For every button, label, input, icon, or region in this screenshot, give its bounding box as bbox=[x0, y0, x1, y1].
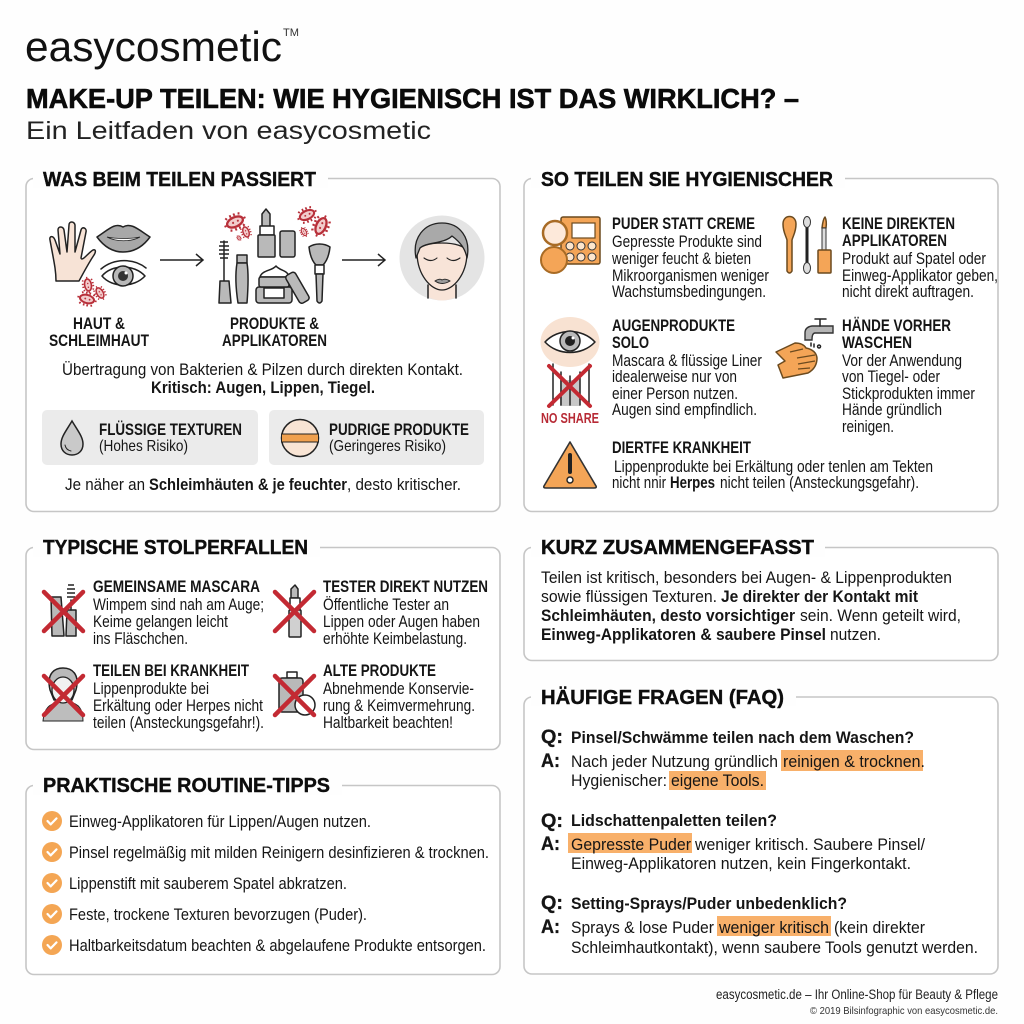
card: fluessige texturen: FLÜSSIGE TEXTUREN bbox=[99, 420, 242, 439]
text: diertfe krankheit: DIERTFE KRANKHEIT bbox=[612, 438, 751, 457]
text block: uebertragung: Kritisch: Augen, Lippen, Tiegel. bbox=[151, 379, 375, 397]
text: augenprodukte solo: idealerweise nur von bbox=[612, 368, 737, 386]
arrow bbox=[160, 254, 203, 266]
mascara tube bbox=[236, 255, 248, 303]
icon: powder compact bbox=[282, 420, 318, 456]
label: haut und schleimhaut: SCHLEIMHAUT bbox=[49, 331, 149, 350]
faq 1: Nach jeder Nutzung gründlich bbox=[571, 753, 778, 771]
tip 2: Pinsel regelmäßig mit milden Reinigern desinfizieren & trocknen. bbox=[69, 844, 489, 862]
text: tester direkt nutzen: erhöhte Keimbelastung. bbox=[323, 630, 467, 648]
faq 3: Schleimhautkontakt), wenn saubere Tools genutzt werden. bbox=[571, 939, 978, 957]
logo: TM bbox=[283, 27, 299, 39]
text block: uebertragung bbox=[62, 361, 463, 397]
text: tester direkt nutzen: Lippen oder Augen haben bbox=[323, 613, 480, 631]
icon: hand bbox=[50, 222, 95, 281]
text: diertfe krankheit: nicht teilen (Ansteckungsgefahr). bbox=[720, 474, 919, 492]
makeup brush bbox=[309, 244, 330, 303]
faq 3: Setting-Sprays/Puder unbedenklich? bbox=[571, 895, 847, 913]
footer: © 2019 Bilsinfographic von easycosmetic.de. bbox=[810, 1005, 998, 1017]
card: pudrige produkte: (Geringeres Risiko) bbox=[329, 438, 446, 455]
text: augenprodukte solo: Augen sind empfindlich. bbox=[612, 401, 757, 419]
card: pudrige produkte bbox=[269, 410, 484, 465]
text block: zusammenfassung bbox=[541, 569, 961, 644]
faq 1: Pinsel/Schwämme teilen nach dem Waschen? bbox=[571, 729, 914, 747]
text: alte produkte: ALTE PRODUKTE bbox=[323, 661, 436, 680]
text: haende vorher waschen: Hände gründlich bbox=[842, 401, 942, 419]
text: haende vorher waschen: von Tiegel- oder bbox=[842, 368, 940, 386]
faq 3: weniger kritisch bbox=[718, 919, 829, 937]
text block: zusammenfassung: Je direkter der Kontakt mit bbox=[721, 588, 918, 606]
text: augenprodukte solo: AUGENPRODUKTE bbox=[612, 316, 735, 335]
icon: palette bbox=[541, 217, 600, 273]
text block: fazit: , desto kritischer. bbox=[347, 476, 461, 494]
heading: so teilen sie hygienischer: SO TEILEN SIE HYGIENISCHER bbox=[541, 169, 834, 191]
faq 1 bbox=[541, 727, 925, 790]
text: puder statt creme: Mikroorganismen weniger bbox=[612, 267, 769, 285]
icon: warning bbox=[544, 442, 596, 488]
faq 3: A: bbox=[541, 917, 560, 938]
text: diertfe krankheit bbox=[612, 438, 933, 492]
panel: typische stolperfallen bbox=[26, 537, 500, 750]
text block: fazit: Schleimhäuten & je feuchter bbox=[149, 476, 348, 494]
label: produkte und applikatoren bbox=[222, 314, 327, 350]
faq 1: Q: bbox=[541, 727, 563, 748]
icon: germs on skin bbox=[76, 276, 109, 309]
text: gemeinsame mascara bbox=[93, 577, 264, 648]
tip 1: Einweg-Applikatoren für Lippen/Augen nutzen. bbox=[69, 813, 371, 831]
heading: was beim teilen passiert: WAS BEIM TEILEN PASSIERT bbox=[43, 169, 316, 191]
text block: zusammenfassung: sowie flüssigen Texturen. bbox=[541, 588, 717, 606]
faq 2: A: bbox=[541, 834, 560, 855]
text: augenprodukte solo: Mascara & flüssige Liner bbox=[612, 352, 762, 370]
text: puder statt creme: PUDER STATT CREME bbox=[612, 214, 755, 233]
text: gemeinsame mascara: ins Fläschchen. bbox=[93, 630, 188, 648]
card: fluessige texturen: (Hohes Risiko) bbox=[99, 438, 188, 455]
text: gemeinsame mascara: GEMEINSAME MASCARA bbox=[93, 577, 260, 596]
text: augenprodukte solo: einer Person nutzen. bbox=[612, 385, 738, 403]
faq 3: Sprays & lose Puder bbox=[571, 919, 714, 937]
heading: praktische routine-tipps: PRAKTISCHE ROUTINE-TIPPS bbox=[43, 775, 330, 797]
icon: eye bbox=[101, 261, 146, 286]
faq 3: (kein direkter bbox=[834, 919, 925, 937]
text block: zusammenfassung: nutzen. bbox=[830, 626, 881, 644]
faq 3: Q: bbox=[541, 893, 563, 914]
title: MAKE-UP TEILEN: WIE HYGIENISCH IST DAS WIRKLICH? – bbox=[26, 83, 799, 114]
icon: hand washing bbox=[776, 319, 833, 378]
icon: crossed sick person bbox=[43, 668, 83, 721]
tip 4: Feste, trockene Texturen bevorzugen (Puder). bbox=[69, 906, 367, 924]
panel: praktische routine-tipps bbox=[26, 775, 500, 974]
text: teilen bei krankheit bbox=[93, 661, 264, 732]
text block: zusammenfassung: Schleimhäuten, desto vorsichtiger bbox=[541, 607, 796, 625]
text: augenprodukte solo: SOLO bbox=[612, 333, 649, 352]
text: puder statt creme: Gepresste Produkte sind bbox=[612, 233, 762, 251]
text: puder statt creme: weniger feucht & bieten bbox=[611, 250, 751, 268]
icon: drop bbox=[61, 421, 83, 455]
faq 3 bbox=[541, 893, 978, 957]
label: haut und schleimhaut bbox=[49, 314, 149, 350]
card: pudrige produkte: PUDRIGE PRODUKTE bbox=[329, 420, 469, 439]
heading: haeufige fragen: HÄUFIGE FRAGEN (FAQ) bbox=[541, 686, 784, 709]
arrow bbox=[342, 254, 385, 266]
heading: typische stolperfallen: TYPISCHE STOLPERFALLEN bbox=[43, 537, 308, 559]
panel: haeufige fragen bbox=[524, 686, 998, 974]
label: produkte und applikatoren: APPLIKATOREN bbox=[222, 331, 327, 350]
text: haende vorher waschen bbox=[842, 316, 975, 436]
text: haende vorher waschen: Vor der Anwendung bbox=[842, 352, 962, 370]
text block: fazit: Je näher an bbox=[65, 476, 145, 494]
text: haende vorher waschen: HÄNDE VORHER bbox=[842, 316, 951, 335]
icon: eye no share bbox=[540, 317, 600, 427]
logo: easycosmetic bbox=[25, 23, 282, 70]
text: keine direkten applikatoren: Produkt auf Spatel oder bbox=[842, 250, 986, 268]
text: keine direkten applikatoren bbox=[842, 214, 998, 301]
faq 1: Hygienischer: bbox=[571, 772, 667, 790]
footer bbox=[716, 987, 998, 1017]
icon: crossed mascara bbox=[44, 585, 83, 636]
faq 2 bbox=[541, 811, 925, 873]
subtitle: Ein Leitfaden von easycosmetic bbox=[26, 117, 431, 145]
text: tester direkt nutzen: TESTER DIREKT NUTZEN bbox=[323, 577, 488, 596]
icon: lips bbox=[97, 225, 150, 252]
text: alte produkte: Abnehmende Konservie- bbox=[323, 680, 474, 698]
text block: zusammenfassung: Teilen ist kritisch, besonders bei Augen- & Lippenprodukten bbox=[541, 569, 952, 587]
text: diertfe krankheit: Herpes bbox=[670, 474, 715, 492]
faq 2: Einweg-Applikatoren nutzen, kein Fingerkontakt. bbox=[571, 855, 911, 873]
text block: zusammenfassung: Einweg-Applikatoren & saubere Pinsel bbox=[541, 626, 826, 644]
text: teilen bei krankheit: Lippenprodukte bei bbox=[93, 680, 209, 698]
icon: cosmetic products bbox=[219, 209, 330, 304]
text: alte produkte: rung & Keimvermehrung. bbox=[323, 697, 475, 715]
lipstick cap bbox=[280, 231, 295, 257]
faq 2: weniger kritisch. Saubere Pinsel/ bbox=[694, 836, 925, 854]
text: diertfe krankheit: Lippenprodukte bei Erkältung oder tenlen am Tekten bbox=[614, 458, 933, 476]
text: alte produkte bbox=[323, 661, 475, 732]
text block: fazit bbox=[65, 476, 461, 494]
text: puder statt creme bbox=[611, 214, 769, 301]
faq 2: Lidschattenpaletten teilen? bbox=[571, 812, 777, 830]
text: haende vorher waschen: WASCHEN bbox=[842, 333, 912, 352]
icon: eye no share: NO SHARE bbox=[541, 411, 599, 427]
label: produkte und applikatoren: PRODUKTE & bbox=[230, 314, 319, 333]
text: tester direkt nutzen: Öffentliche Tester an bbox=[323, 596, 449, 614]
heading: kurz zusammengefasst: KURZ ZUSAMMENGEFASST bbox=[541, 537, 814, 559]
text: teilen bei krankheit: teilen (Ansteckungsgefahr!). bbox=[93, 714, 264, 732]
icon: crossed tester bbox=[275, 585, 314, 637]
mascara wand bbox=[219, 241, 231, 303]
text: gemeinsame mascara: Wimpem sind nah am Auge; bbox=[93, 596, 264, 614]
text: diertfe krankheit: nicht nnir bbox=[612, 474, 666, 492]
icon: germs on products bbox=[221, 204, 333, 242]
text: keine direkten applikatoren: APPLIKATOREN bbox=[842, 231, 947, 250]
text: haende vorher waschen: Stickprodukten immer bbox=[842, 385, 975, 403]
panel: kurz zusammengefasst bbox=[524, 537, 998, 660]
text: keine direkten applikatoren: KEINE DIREKTEN bbox=[842, 214, 955, 233]
text block: zusammenfassung: sein. Wenn geteilt wird, bbox=[800, 607, 961, 625]
text block: uebertragung: Übertragung von Bakterien & Pilzen durch direkten Kontakt. bbox=[62, 361, 463, 379]
text: alte produkte: Haltbarkeit beachten! bbox=[323, 714, 453, 732]
icon: crossed old products bbox=[275, 672, 315, 715]
faq 1: A: bbox=[541, 751, 560, 772]
text: teilen bei krankheit: Erkältung oder Herpes nicht bbox=[93, 697, 263, 715]
text: tester direkt nutzen bbox=[323, 577, 488, 648]
faq 2: Q: bbox=[541, 811, 563, 832]
cream jar bbox=[256, 266, 310, 304]
text: augenprodukte solo bbox=[612, 316, 762, 419]
text: puder statt creme: Wachstumsbedingungen. bbox=[612, 283, 766, 301]
lipstick bbox=[258, 209, 275, 257]
tip 5: Haltbarkeitsdatum beachten & abgelaufene Produkte entsorgen. bbox=[69, 937, 486, 955]
card: fluessige texturen bbox=[42, 410, 258, 465]
text: gemeinsame mascara: Keime gelangen leicht bbox=[93, 613, 228, 631]
label: haut und schleimhaut: HAUT & bbox=[73, 314, 125, 333]
text: teilen bei krankheit: TEILEN BEI KRANKHEIT bbox=[93, 661, 249, 680]
icon: applicators bbox=[783, 216, 831, 274]
panel: so teilen sie hygienischer bbox=[524, 169, 998, 512]
faq 2: Gepresste Puder bbox=[571, 836, 691, 854]
text: keine direkten applikatoren: nicht direkt auftragen. bbox=[842, 283, 974, 301]
icon: face bbox=[400, 216, 484, 300]
faq 1: eigene Tools. bbox=[671, 772, 764, 790]
panel: was beim teilen passiert bbox=[26, 169, 500, 512]
text: haende vorher waschen: reinigen. bbox=[842, 418, 894, 436]
faq 1: reinigen & trocknen. bbox=[783, 753, 925, 771]
tip 3: Lippenstift mit sauberem Spatel abkratzen. bbox=[69, 875, 347, 893]
